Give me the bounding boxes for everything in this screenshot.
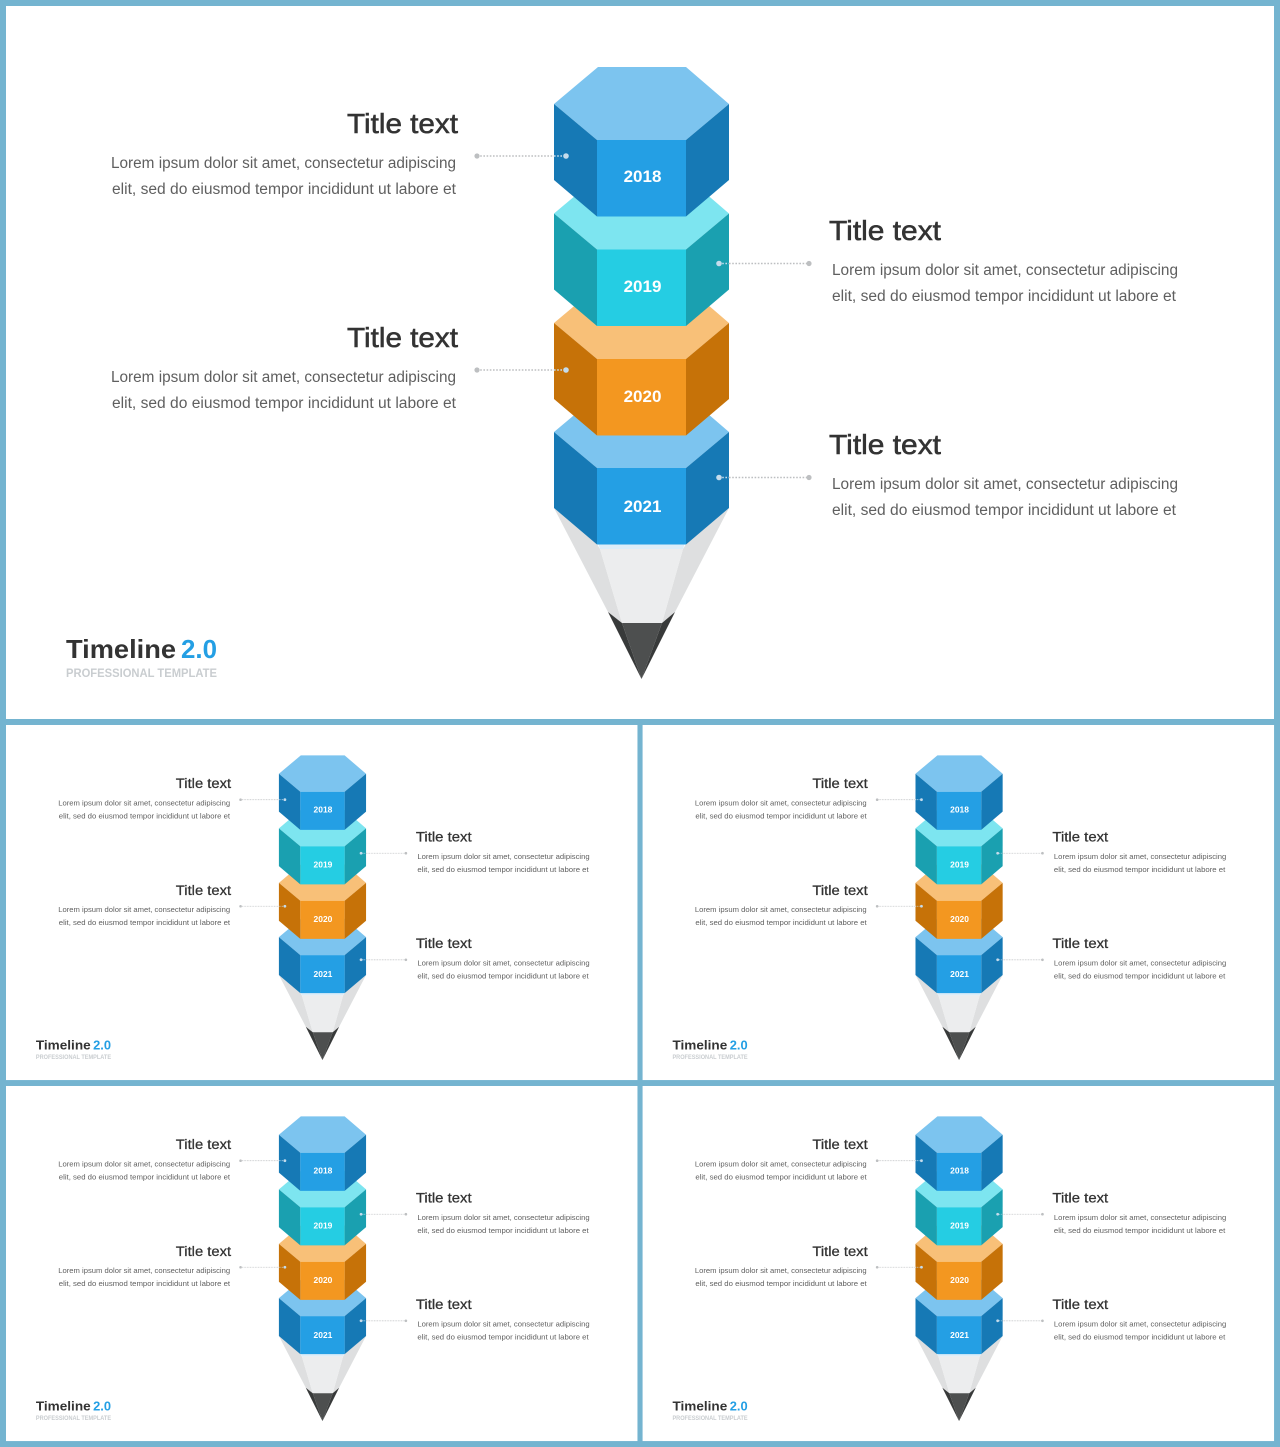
text block 2020: Title text <box>812 882 868 898</box>
text block 2018: Lorem ipsum dolor sit amet, consectetur adipiscing <box>58 799 230 808</box>
text block 2019: elit, sed do eiusmod tempor incididunt ut labore et <box>832 288 1177 305</box>
text block 2019 <box>1052 1190 1226 1235</box>
pencil <box>279 1116 366 1421</box>
footer title: Timeline <box>36 1399 91 1414</box>
text block 2018 <box>695 1136 868 1182</box>
text block 2020: Lorem ipsum dolor sit amet, consectetur adipiscing <box>58 905 230 914</box>
connector 2020 <box>474 367 569 373</box>
text block 2021: Lorem ipsum dolor sit amet, consectetur adipiscing <box>832 476 1178 493</box>
text block 2020 <box>695 882 868 927</box>
text block 2019: elit, sed do eiusmod tempor incididunt ut labore et <box>417 865 590 874</box>
text block 2019 <box>1052 829 1226 874</box>
footer title: 2.0 <box>181 634 217 664</box>
text block 2020 <box>58 882 231 927</box>
text block 2021: Lorem ipsum dolor sit amet, consectetur adipiscing <box>417 1320 590 1329</box>
pencil: 2019 <box>314 859 333 869</box>
connectors <box>876 798 1044 961</box>
text block 2018: Lorem ipsum dolor sit amet, consectetur adipiscing <box>695 1160 867 1169</box>
text block 2018: elit, sed do eiusmod tempor incididunt ut labore et <box>695 812 868 821</box>
text block 2021: Lorem ipsum dolor sit amet, consectetur adipiscing <box>1054 1320 1226 1329</box>
footer title: PROFESSIONAL TEMPLATE <box>66 666 217 680</box>
text block 2019: Lorem ipsum dolor sit amet, consectetur adipiscing <box>1054 852 1226 861</box>
text block 2021: Title text <box>1052 935 1108 951</box>
pencil <box>554 67 729 679</box>
text block 2019 <box>829 215 1178 305</box>
text block 2019: elit, sed do eiusmod tempor incididunt ut labore et <box>417 1226 590 1235</box>
connectors <box>239 798 407 961</box>
text block 2019 <box>416 1190 590 1235</box>
footer title: Timeline <box>36 1038 91 1053</box>
pencil: 2018 <box>950 1166 969 1176</box>
footer title: Timeline <box>672 1399 727 1414</box>
text block 2021 <box>829 429 1178 519</box>
pencil: 2021 <box>950 1330 969 1340</box>
text block 2019: Lorem ipsum dolor sit amet, consectetur adipiscing <box>417 852 590 861</box>
footer title <box>36 1038 111 1061</box>
text block 2018 <box>58 775 231 821</box>
footer title: PROFESSIONAL TEMPLATE <box>36 1055 111 1061</box>
footer title: PROFESSIONAL TEMPLATE <box>672 1416 748 1422</box>
text block 2020: elit, sed do eiusmod tempor incididunt ut labore et <box>695 1279 868 1288</box>
pencil: 2018 <box>314 1166 333 1176</box>
footer title: PROFESSIONAL TEMPLATE <box>672 1055 748 1061</box>
text block 2018: elit, sed do eiusmod tempor incididunt ut labore et <box>59 812 231 821</box>
text block 2020: elit, sed do eiusmod tempor incididunt ut labore et <box>695 918 868 927</box>
connectors <box>876 1159 1044 1322</box>
footer title: 2.0 <box>730 1038 748 1053</box>
text block 2021: Title text <box>416 1296 472 1312</box>
panel: small slide top left <box>6 725 637 1080</box>
text block 2020: elit, sed do eiusmod tempor incididunt ut labore et <box>112 395 457 412</box>
text block 2020: elit, sed do eiusmod tempor incididunt ut labore et <box>59 918 231 927</box>
text block 2019: Lorem ipsum dolor sit amet, consectetur adipiscing <box>417 1213 590 1222</box>
text block 2018: Title text <box>347 108 458 139</box>
connector 2018 <box>474 153 569 159</box>
footer title: 2.0 <box>93 1399 111 1414</box>
text block 2021: Title text <box>829 429 941 460</box>
text block 2021: elit, sed do eiusmod tempor incididunt ut labore et <box>417 971 590 980</box>
text block 2019: Lorem ipsum dolor sit amet, consectetur adipiscing <box>832 262 1178 279</box>
panel: small slide top right <box>643 725 1274 1080</box>
text block 2018: elit, sed do eiusmod tempor incididunt ut labore et <box>59 1173 231 1182</box>
panel: small slide bottom right <box>643 1086 1274 1441</box>
pencil: 2020 <box>314 1275 333 1285</box>
text block 2021: Lorem ipsum dolor sit amet, consectetur adipiscing <box>417 959 590 968</box>
text block 2018: elit, sed do eiusmod tempor incididunt ut labore et <box>695 1173 868 1182</box>
pencil: 2021 <box>314 1330 333 1340</box>
text block 2019 <box>416 829 590 874</box>
text block 2019: Title text <box>416 829 472 845</box>
connector 2019 <box>716 261 812 266</box>
text block 2021: elit, sed do eiusmod tempor incididunt ut labore et <box>1054 971 1226 980</box>
text block 2018: Lorem ipsum dolor sit amet, consectetur adipiscing <box>111 155 456 172</box>
pencil: 2021 <box>314 969 333 979</box>
text block 2021 <box>416 1296 590 1341</box>
text block 2020: Lorem ipsum dolor sit amet, consectetur adipiscing <box>58 1266 230 1275</box>
text block 2018: elit, sed do eiusmod tempor incididunt ut labore et <box>112 181 457 198</box>
text block 2021: Title text <box>1052 1296 1108 1312</box>
pencil: 2018 <box>950 805 969 815</box>
text block 2018: Title text <box>176 775 231 791</box>
text block 2021 <box>1052 935 1226 980</box>
pencil <box>915 755 1003 1060</box>
footer title <box>36 1399 111 1422</box>
pencil <box>279 755 366 1060</box>
text block 2020: Title text <box>812 1243 868 1259</box>
text block 2018: Title text <box>812 1136 868 1152</box>
text block 2019: elit, sed do eiusmod tempor incididunt ut labore et <box>1054 1226 1226 1235</box>
text block 2019: elit, sed do eiusmod tempor incididunt ut labore et <box>1054 865 1226 874</box>
pencil: 2021 <box>950 969 969 979</box>
text block 2018: Lorem ipsum dolor sit amet, consectetur adipiscing <box>695 799 867 808</box>
text block 2019: Title text <box>416 1190 472 1206</box>
pencil: 2019 <box>950 859 969 869</box>
pencil: 2019 <box>314 1220 333 1230</box>
text block 2021 <box>416 935 590 980</box>
text block 2020: Title text <box>347 322 458 353</box>
block 2020: 2020 <box>624 387 661 406</box>
pencil: 2020 <box>950 914 969 924</box>
text block 2021: elit, sed do eiusmod tempor incididunt ut labore et <box>1054 1332 1226 1341</box>
footer title <box>66 634 217 680</box>
pencil <box>915 1116 1003 1421</box>
text block 2020: Title text <box>176 882 231 898</box>
text block 2018 <box>695 775 868 821</box>
text block 2019: Lorem ipsum dolor sit amet, consectetur adipiscing <box>1054 1213 1226 1222</box>
block 2021 <box>554 395 729 544</box>
pencil: 2020 <box>314 914 333 924</box>
text block 2018: Title text <box>176 1136 231 1152</box>
panel: small slide bottom left <box>6 1086 637 1441</box>
footer title <box>672 1038 748 1061</box>
pencil: 2018 <box>314 805 333 815</box>
text block 2020: Title text <box>176 1243 231 1259</box>
block 2019: 2019 <box>624 277 661 296</box>
text block 2020: Lorem ipsum dolor sit amet, consectetur adipiscing <box>695 905 867 914</box>
panel: large slide <box>6 6 1274 719</box>
pencil: 2019 <box>950 1220 969 1230</box>
pencil tip <box>554 508 729 679</box>
text block 2021: Lorem ipsum dolor sit amet, consectetur adipiscing <box>1054 959 1226 968</box>
block 2020 <box>554 286 729 436</box>
footer title: Timeline <box>66 634 176 664</box>
footer title <box>672 1399 748 1422</box>
footer title: 2.0 <box>93 1038 111 1053</box>
text block 2018: Title text <box>812 775 868 791</box>
connector 2021 <box>716 475 812 480</box>
block 2019 <box>554 176 729 326</box>
pencil: 2020 <box>950 1275 969 1285</box>
text block 2018: Lorem ipsum dolor sit amet, consectetur adipiscing <box>58 1160 230 1169</box>
text block 2019: Title text <box>1052 829 1108 845</box>
text block 2019: Title text <box>829 215 941 246</box>
block 2018: 2018 <box>624 167 661 186</box>
block 2018 <box>554 67 729 216</box>
text block 2021: Title text <box>416 935 472 951</box>
text block 2019: Title text <box>1052 1190 1108 1206</box>
text block 2020 <box>58 1243 231 1288</box>
footer title: Timeline <box>672 1038 727 1053</box>
text block 2021 <box>1052 1296 1226 1341</box>
text block 2018 <box>111 108 458 198</box>
text block 2021: elit, sed do eiusmod tempor incididunt ut labore et <box>832 502 1177 519</box>
connectors <box>239 1159 407 1322</box>
footer title: 2.0 <box>730 1399 748 1414</box>
text block 2020: elit, sed do eiusmod tempor incididunt ut labore et <box>59 1279 231 1288</box>
text block 2020 <box>111 322 458 412</box>
text block 2018 <box>58 1136 231 1182</box>
text block 2020: Lorem ipsum dolor sit amet, consectetur adipiscing <box>111 369 456 386</box>
text block 2021: elit, sed do eiusmod tempor incididunt ut labore et <box>417 1332 590 1341</box>
block 2021: 2021 <box>624 497 661 516</box>
text block 2020: Lorem ipsum dolor sit amet, consectetur adipiscing <box>695 1266 867 1275</box>
footer title: PROFESSIONAL TEMPLATE <box>36 1416 111 1422</box>
text block 2020 <box>695 1243 868 1288</box>
